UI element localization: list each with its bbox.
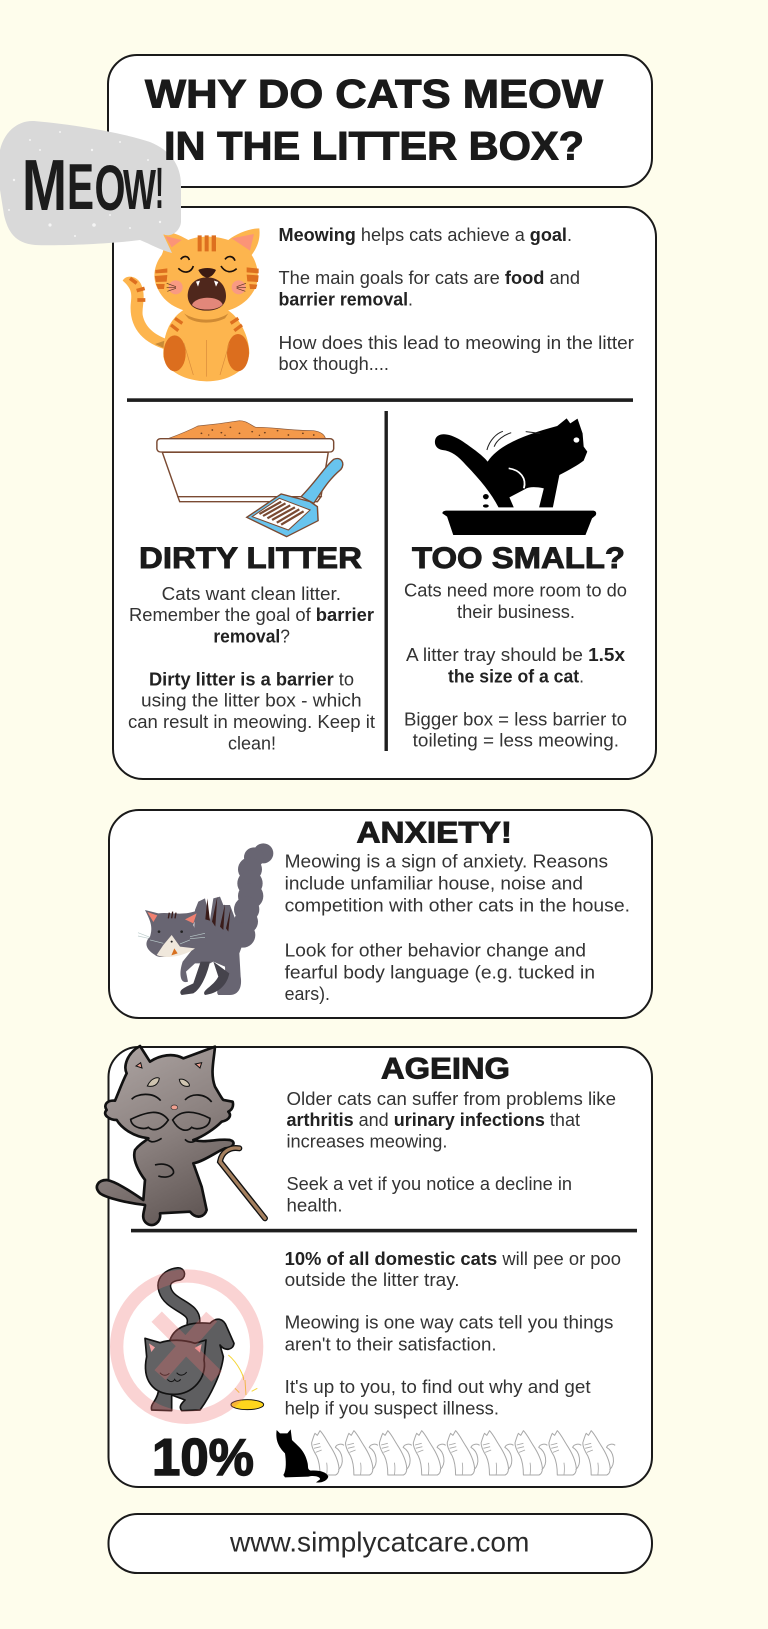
- bubble speckles: [8, 131, 161, 237]
- text: too small explanation: the size of a cat.: [448, 665, 584, 686]
- text: anxiety explanation: Meowing is a sign of anxiety. Reasons: [285, 851, 608, 872]
- text: dirty litter explanation: Remember the goal of barrier: [129, 604, 374, 625]
- text: meowing goals: Meowing helps cats achieve a goal.: [278, 224, 572, 245]
- prohibition sign: [117, 1276, 257, 1417]
- icon: black cat in tray: [435, 418, 596, 535]
- title: IN THE LITTER BOX?: [164, 124, 584, 168]
- icon: scared grey cat: [138, 843, 273, 995]
- heading: anxiety: ANXIETY!: [356, 817, 512, 850]
- icon row: one in ten cats: [276, 1429, 615, 1483]
- text: meowing goals: barrier removal.: [278, 289, 413, 310]
- website url: www.simplycatcare.com: [229, 1527, 529, 1558]
- text: dirty litter explanation: clean!: [228, 732, 276, 753]
- text: ten percent explanation: [285, 1248, 621, 1419]
- text: dirty litter explanation: [128, 583, 375, 753]
- panel: ageing: [97, 1046, 652, 1487]
- text: too small explanation: [404, 580, 627, 751]
- litter speckles: [201, 426, 315, 436]
- meow lettering: W: [123, 158, 156, 222]
- text: meowing goals: The main goals for cats are food and: [278, 267, 580, 288]
- text: ageing explanation: increases meowing.: [286, 1130, 448, 1151]
- speech bubble: meow: [0, 121, 181, 253]
- text: dirty litter explanation: Dirty litter is a barrier to: [149, 668, 354, 689]
- meow lettering: O: [94, 152, 126, 224]
- text: ageing explanation: Seek a vet if you notice a decline in: [286, 1173, 572, 1194]
- text: ageing explanation: [286, 1088, 616, 1215]
- meow lettering: M: [22, 146, 67, 226]
- text: anxiety explanation: include unfamiliar house, noise and: [285, 873, 583, 894]
- text: too small explanation: toileting = less meowing.: [413, 730, 619, 751]
- icon: cat peeing with prohibition sign: [117, 1274, 264, 1417]
- text: dirty litter explanation: Cats want clean litter.: [162, 583, 341, 604]
- text: anxiety explanation: fearful body language (e.g. tucked in: [285, 961, 595, 982]
- heading: ageing: AGEING: [381, 1052, 510, 1085]
- text: ageing explanation: health.: [286, 1194, 342, 1215]
- icon: meowing orange cat: [123, 228, 260, 381]
- heading: dirty litter: DIRTY LITTER: [139, 542, 362, 575]
- text: meowing goals: [278, 224, 634, 374]
- text: ten percent explanation: aren't to their satisfaction.: [285, 1333, 497, 1354]
- text: ten percent explanation: Meowing is one way cats tell you things: [285, 1312, 613, 1333]
- title: WHY DO CATS MEOW: [145, 72, 604, 116]
- text: dirty litter explanation: using the litter box - which: [141, 690, 362, 711]
- text: ten percent explanation: It's up to you, to find out why and get: [285, 1376, 591, 1397]
- icon: litter box and scoop: [157, 421, 343, 537]
- title box: [108, 55, 652, 187]
- text: anxiety explanation: [285, 851, 630, 1004]
- website box: [108, 1514, 652, 1573]
- text: anxiety explanation: competition with other cats in the house.: [285, 895, 630, 916]
- stat: ten percent: 10%: [152, 1429, 254, 1487]
- text: too small explanation: their business.: [457, 601, 575, 622]
- text: anxiety explanation: Look for other behavior change and: [285, 939, 586, 960]
- text: too small explanation: Cats need more room to do: [404, 580, 627, 601]
- panel: goals and litter box causes: [113, 207, 656, 779]
- text: ten percent explanation: 10% of all domestic cats will pee or poo: [285, 1248, 621, 1269]
- text: meowing goals: How does this lead to meowing in the litter: [278, 332, 634, 353]
- text: too small explanation: Bigger box = less barrier to: [404, 708, 627, 729]
- title: [145, 72, 604, 168]
- text: ten percent explanation: outside the litter tray.: [285, 1269, 460, 1290]
- meow lettering: [22, 146, 164, 226]
- panel: anxiety: [109, 810, 652, 1018]
- text: meowing goals: box though....: [278, 353, 389, 374]
- icon: old cat with cane: [97, 1046, 265, 1225]
- text: ten percent explanation: help if you suspect illness.: [285, 1398, 499, 1419]
- heading: too small: TOO SMALL?: [412, 542, 625, 575]
- text: dirty litter explanation: removal?: [213, 625, 290, 646]
- meow lettering: E: [67, 150, 94, 223]
- text: ageing explanation: Older cats can suffer from problems like: [286, 1088, 616, 1109]
- text: dirty litter explanation: can result in meowing. Keep it: [128, 711, 375, 732]
- text: anxiety explanation: ears).: [285, 983, 330, 1004]
- text: ageing explanation: arthritis and urinary infections that: [286, 1109, 580, 1130]
- speech bubble: meow: !: [155, 156, 164, 221]
- text: too small explanation: A litter tray should be 1.5x: [406, 644, 626, 665]
